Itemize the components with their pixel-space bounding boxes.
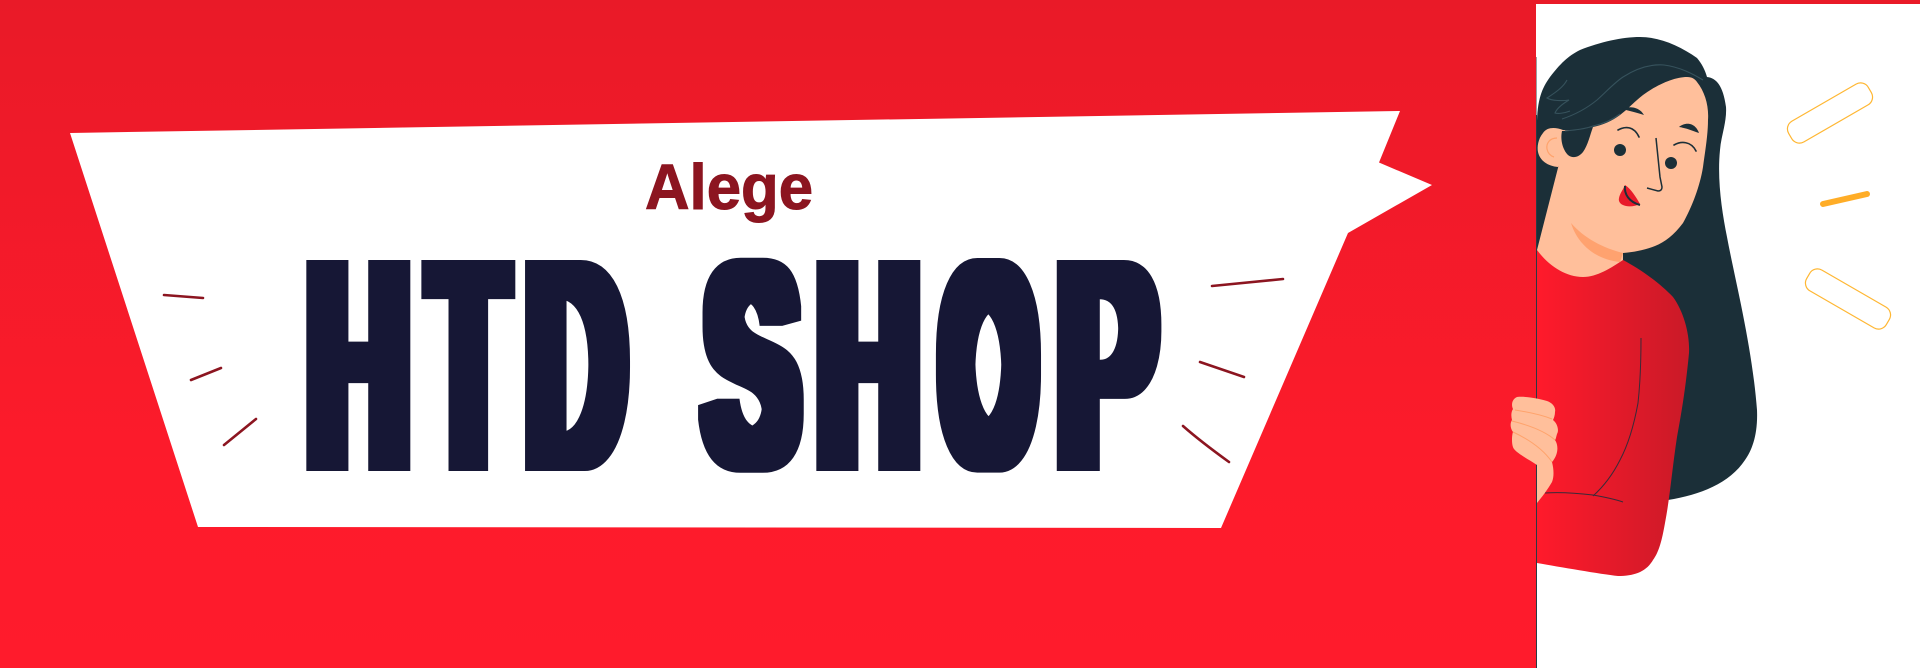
neck shadow <box>1571 223 1623 262</box>
top red strip <box>1536 0 1920 4</box>
left burst dashes <box>164 295 256 445</box>
title: HTD SHOP: P <box>1058 199 1155 532</box>
decorative capsule: lower right <box>1802 266 1894 332</box>
face and neck <box>1537 77 1708 285</box>
panel edge line <box>1536 115 1538 668</box>
decorative capsule: top right <box>1784 80 1876 146</box>
decorative dash: orange <box>1823 194 1867 204</box>
eyes <box>1614 144 1677 169</box>
red background panel <box>0 0 1536 668</box>
nose <box>1647 138 1662 191</box>
sleeve folds <box>1545 338 1641 502</box>
ear <box>1538 128 1563 167</box>
right burst dashes <box>1183 279 1283 462</box>
title: HTD SHOP: H <box>818 199 918 532</box>
eyelids <box>1618 128 1696 151</box>
eyebrows <box>1622 107 1699 133</box>
subtitle: Alege: Alege <box>645 151 813 223</box>
title: HTD SHOP: H <box>308 199 408 532</box>
inner ear line <box>1547 138 1557 157</box>
hair <box>1537 37 1757 500</box>
sideburn <box>1561 127 1593 157</box>
panel edge line, faint above the hair <box>1536 57 1538 115</box>
title: HTD SHOP: D <box>527 199 625 532</box>
title: HTD SHOP: T <box>431 199 506 532</box>
hair strands <box>1547 65 1703 131</box>
finger lines <box>1512 410 1555 462</box>
title: HTD SHOP <box>306 199 1162 532</box>
mouth <box>1619 185 1640 206</box>
white ribbon banner <box>70 111 1432 528</box>
character: woman peeking from behind panel <box>1537 37 1757 576</box>
hand gripping panel edge <box>1511 397 1558 503</box>
title: HTD SHOP: S <box>705 207 798 524</box>
title: HTD SHOP: O <box>942 212 1035 519</box>
shirt <box>1537 250 1689 576</box>
tongue line <box>1625 186 1640 205</box>
